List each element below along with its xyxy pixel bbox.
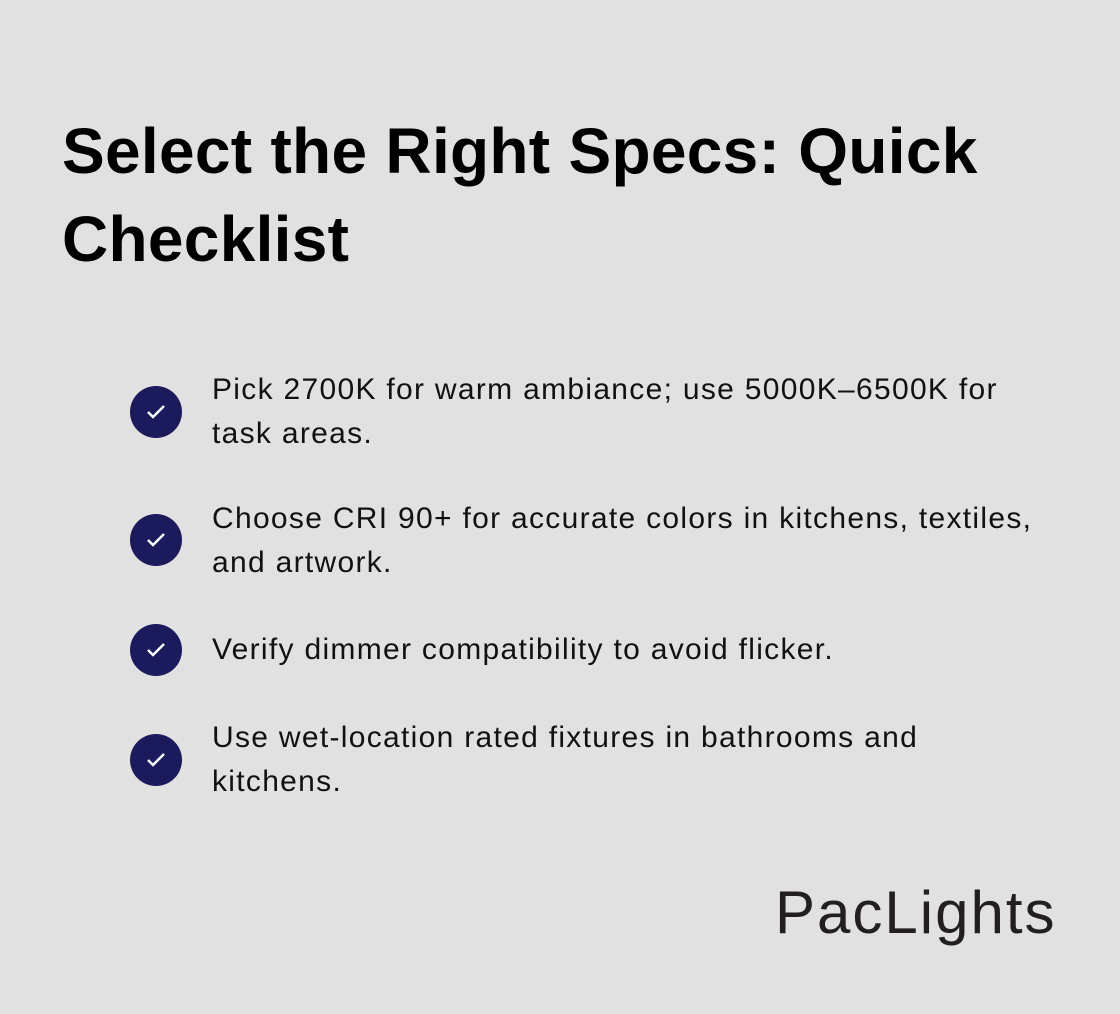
icon: check 4 (130, 734, 182, 786)
icon: check 3 (130, 624, 182, 676)
text 3: Verify dimmer compatibility to avoid flicker. (212, 633, 834, 666)
text 1: Pick 2700K for warm ambiance; use 5000K–6500K for task areas. (212, 373, 998, 450)
text 2: Choose CRI 90+ for accurate colors in kitchens, textiles, and artwork. (212, 502, 1032, 579)
item 1 (130, 373, 998, 450)
logo: PacLights (775, 879, 1056, 946)
text 4: Use wet-location rated fixtures in bathrooms and kitchens. (212, 721, 918, 798)
icon: check 1 (130, 386, 182, 438)
item 2 (130, 502, 1032, 579)
item 4 (130, 721, 918, 798)
item 3 (130, 624, 834, 676)
title: Select the Right Specs: Quick Checklist (62, 115, 978, 275)
icon: check 2 (130, 514, 182, 566)
